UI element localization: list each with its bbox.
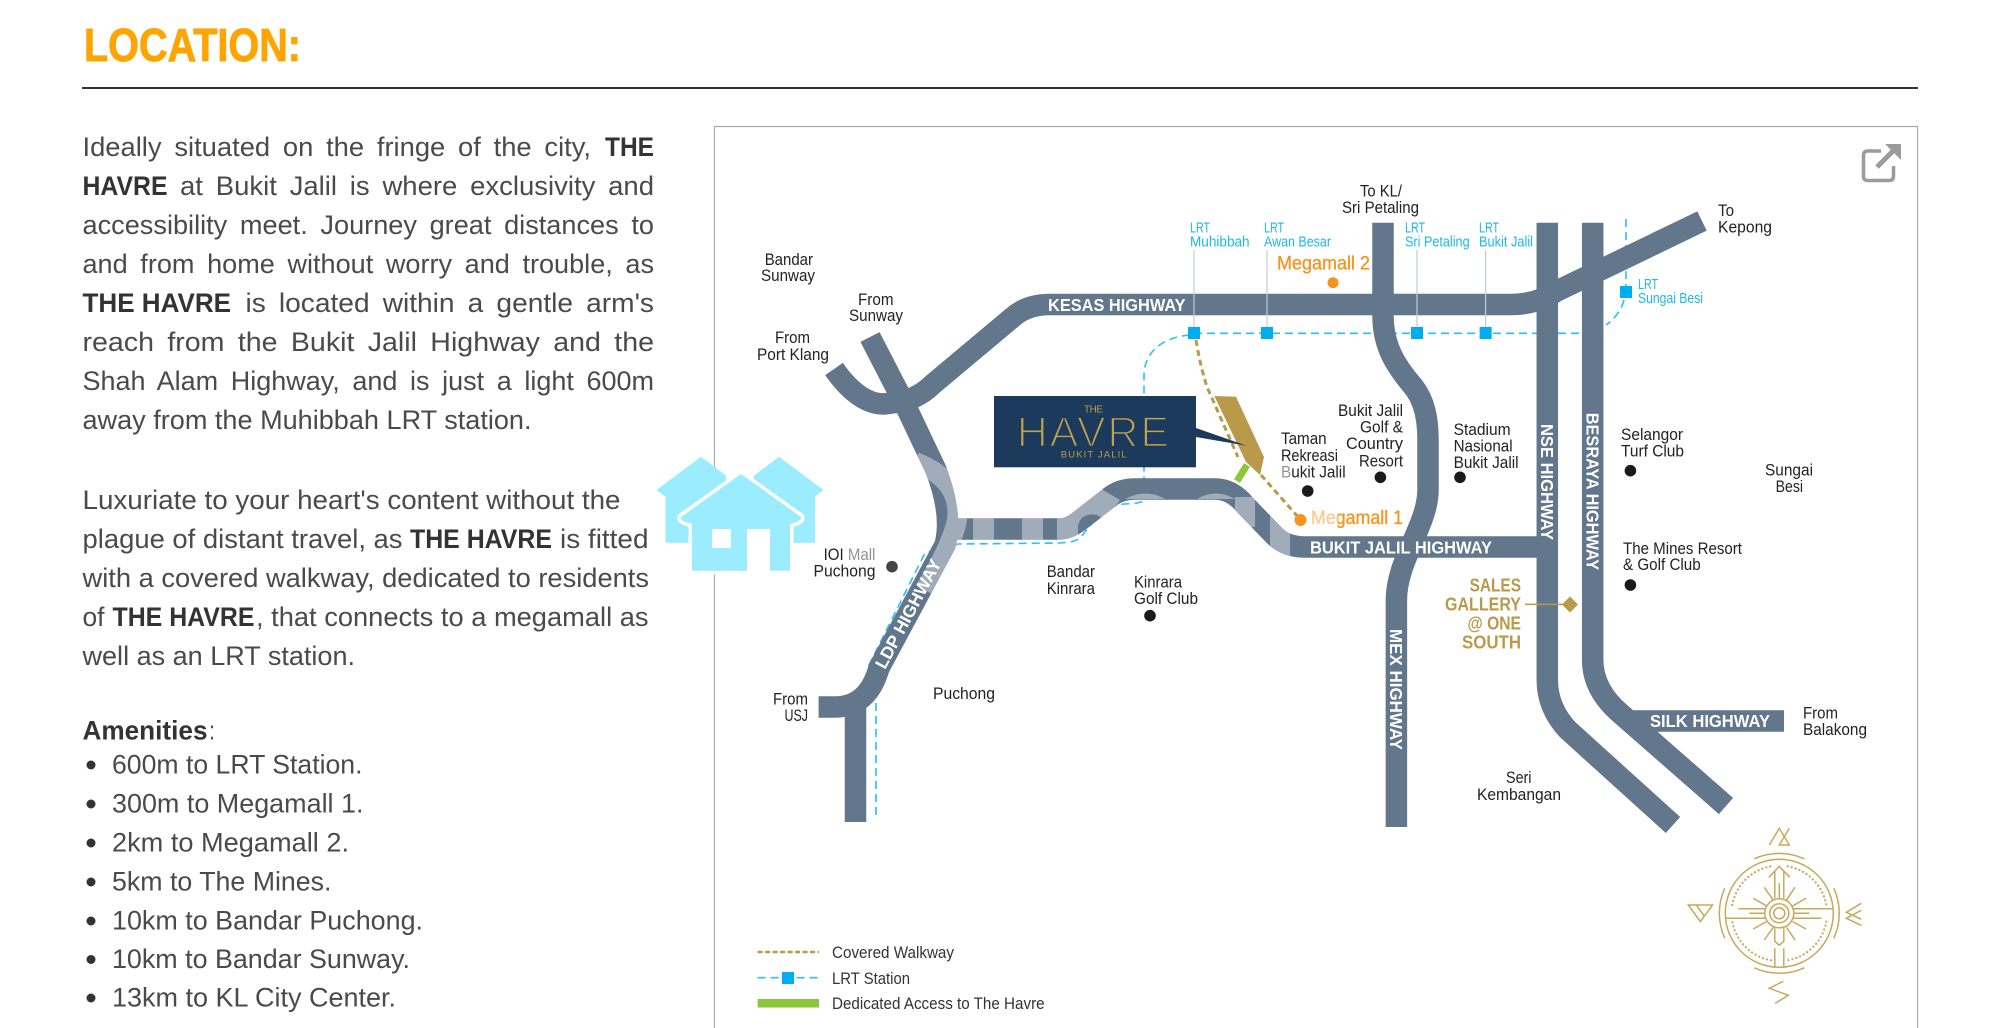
list: amenities: 13km to KL City Center. xyxy=(112,982,396,1012)
place labels: Kembangan xyxy=(1477,785,1561,804)
text block: covered walkway paragraph: with a covered walkway, dedicated to residents xyxy=(81,563,649,593)
place labels: Port Klang xyxy=(757,345,829,364)
place labels: Nasional xyxy=(1454,437,1513,456)
place labels: Balakong xyxy=(1803,720,1867,739)
covered walkway route xyxy=(1196,340,1299,518)
place labels xyxy=(757,182,1867,804)
site: The Havre plot xyxy=(1214,396,1264,475)
highway labels: BUKIT JALIL HIGHWAY xyxy=(1310,537,1492,557)
text block: intro paragraph: accessibility meet. Journey great distances to xyxy=(82,210,654,240)
highway labels xyxy=(871,295,1770,750)
watermark: houses xyxy=(658,458,822,574)
place labels: The Mines Resort xyxy=(1623,539,1742,558)
sales gallery marker: GALLERY xyxy=(1445,594,1522,615)
text block: covered walkway paragraph xyxy=(81,485,649,671)
LRT labels: LRT xyxy=(1638,276,1658,293)
legend: Dedicated Access to The Havre xyxy=(832,994,1045,1013)
place labels: Puchong xyxy=(814,562,876,581)
text block: covered walkway paragraph: plague of distant travel, as xyxy=(82,524,402,554)
highway labels: KESAS HIGHWAY xyxy=(1048,295,1186,315)
LRT labels xyxy=(1190,220,1703,307)
megamall 1 marker: Megamall 1 xyxy=(1311,507,1403,529)
place labels: Bandar xyxy=(765,250,813,269)
text block: covered walkway paragraph: THE HAVRE xyxy=(410,524,552,554)
text block: covered walkway paragraph: is fitted xyxy=(560,524,648,554)
text block: intro paragraph xyxy=(82,132,654,435)
text block: intro paragraph: is located within a gentle arm's xyxy=(246,288,654,318)
place labels: Puchong xyxy=(933,684,995,703)
place labels: Selangor xyxy=(1621,425,1683,444)
place labels: To KL/ xyxy=(1360,182,1402,201)
LRT stations xyxy=(1188,286,1632,339)
dedicated access road xyxy=(1237,465,1247,481)
sales gallery marker: SOUTH xyxy=(1462,631,1521,652)
place labels: Golf & xyxy=(1360,418,1404,437)
list: amenities xyxy=(86,750,423,1012)
callout pointer xyxy=(1196,428,1247,446)
icon: open in new window xyxy=(1864,144,1901,180)
compass xyxy=(1688,828,1861,1003)
list: amenities: 10km to Bandar Sunway. xyxy=(112,944,410,974)
text block: intro paragraph: Ideally situated on the fringe of the city, xyxy=(82,132,591,162)
place labels: Sunway xyxy=(849,306,903,325)
place labels: Besi xyxy=(1776,477,1803,496)
place labels: Kepong xyxy=(1718,218,1772,237)
place labels: From xyxy=(858,290,894,309)
text block: intro paragraph: THE xyxy=(605,132,654,162)
LRT labels: Sri Petaling xyxy=(1405,234,1470,251)
highway labels: MEX HIGHWAY xyxy=(1386,629,1406,750)
place labels: Sungai xyxy=(1765,461,1813,480)
place labels: Sri Petaling xyxy=(1342,198,1419,217)
LRT line xyxy=(868,219,1626,818)
text block: intro paragraph: away from the Muhibbah LRT station. xyxy=(82,405,532,435)
place labels: Kinrara xyxy=(1047,579,1095,598)
LRT labels: LRT xyxy=(1405,220,1425,237)
place labels: Seri xyxy=(1506,768,1532,787)
highway labels: SILK HIGHWAY xyxy=(1650,711,1770,731)
place labels: Bukit Jalil xyxy=(1338,401,1403,420)
text block: covered walkway paragraph: well as an LRT station. xyxy=(81,641,355,671)
watermark: fade over labels xyxy=(846,463,1338,563)
list: amenities: 600m to LRT Station. xyxy=(112,750,362,780)
list: amenities: 2km to Megamall 2. xyxy=(112,828,349,858)
place labels: From xyxy=(775,328,810,347)
place labels: From xyxy=(1803,704,1838,723)
place labels: Bukit Jalil xyxy=(1454,453,1519,472)
place labels: Stadium xyxy=(1454,420,1511,439)
LRT labels: Muhibbah xyxy=(1190,234,1250,251)
LRT leader lines xyxy=(1194,250,1486,333)
logo: The Havre Bukit Jalil: BUKIT JALIL xyxy=(1061,450,1127,460)
place labels: Rekreasi xyxy=(1281,446,1338,465)
place labels: Sunway xyxy=(761,266,815,285)
highway labels: BESRAYA HIGHWAY xyxy=(1582,413,1602,571)
highway labels: NSE HIGHWAY xyxy=(1537,424,1557,540)
title: LOCATION: xyxy=(84,19,301,71)
LRT labels: LRT xyxy=(1479,220,1499,237)
highway labels: LDP HIGHWAY xyxy=(871,555,945,672)
logo: The Havre Bukit Jalil: THE xyxy=(1084,405,1103,416)
legend xyxy=(758,943,1045,1013)
text block: intro paragraph: THE HAVRE xyxy=(82,288,231,318)
place labels: Taman xyxy=(1281,429,1327,448)
sales gallery marker: SALES xyxy=(1470,575,1521,596)
place labels: Bukit Jalil xyxy=(1281,463,1346,482)
place labels: Country xyxy=(1346,434,1403,453)
watermark over roads xyxy=(915,462,1290,590)
place labels: To xyxy=(1718,201,1734,220)
heading: amenities: Amenities xyxy=(82,716,208,746)
megamall 2 marker: Megamall 2 xyxy=(1277,252,1370,274)
LRT labels: Awan Besar xyxy=(1264,234,1331,251)
place markers xyxy=(886,465,1636,622)
text block: covered walkway paragraph: Luxuriate to your heart's content without the xyxy=(82,485,620,515)
place labels: IOI Mall xyxy=(824,545,875,564)
sales gallery marker: @ ONE xyxy=(1468,612,1521,633)
logo: The Havre Bukit Jalil xyxy=(994,396,1196,467)
LRT labels: Sungai Besi xyxy=(1638,290,1703,307)
place labels: Bandar xyxy=(1047,562,1095,581)
text block: covered walkway paragraph: , that connects to a megamall as xyxy=(256,602,648,632)
text block: intro paragraph: HAVRE xyxy=(82,171,168,201)
place labels: Turf Club xyxy=(1621,442,1684,461)
text block: intro paragraph: and from home without worry and trouble, as xyxy=(82,249,654,279)
legend: Covered Walkway xyxy=(832,943,954,962)
list: amenities: 300m to Megamall 1. xyxy=(112,788,364,818)
place labels: USJ xyxy=(784,706,808,725)
place labels: From xyxy=(773,690,808,709)
legend: LRT Station xyxy=(832,969,910,988)
text block: intro paragraph: reach from the Bukit Jalil Highway and the xyxy=(82,327,654,357)
LRT labels: Bukit Jalil xyxy=(1479,234,1533,251)
place labels: & Golf Club xyxy=(1623,555,1701,574)
megamall 2 marker xyxy=(1277,252,1370,288)
list: amenities: 10km to Bandar Puchong. xyxy=(112,906,423,936)
text block: intro paragraph: at Bukit Jalil is where exclusivity and xyxy=(180,171,654,201)
list: amenities: 5km to The Mines. xyxy=(112,866,332,896)
text block: covered walkway paragraph: THE HAVRE xyxy=(112,602,254,632)
LRT labels: LRT xyxy=(1264,220,1284,237)
logo: The Havre Bukit Jalil: HAVRE xyxy=(1017,408,1169,456)
text block: covered walkway paragraph: of xyxy=(82,602,105,632)
sales gallery marker xyxy=(1445,575,1578,652)
heading: amenities: : xyxy=(209,716,215,746)
text block: intro paragraph: Shah Alam Highway, and is just a light 600m xyxy=(82,366,654,396)
LRT labels: LRT xyxy=(1190,220,1210,237)
road network xyxy=(819,221,1784,827)
panel: location map frame xyxy=(714,126,1918,1028)
place labels: Resort xyxy=(1359,452,1403,471)
place labels: Golf Club xyxy=(1134,589,1198,608)
place labels: Kinrara xyxy=(1134,573,1182,592)
